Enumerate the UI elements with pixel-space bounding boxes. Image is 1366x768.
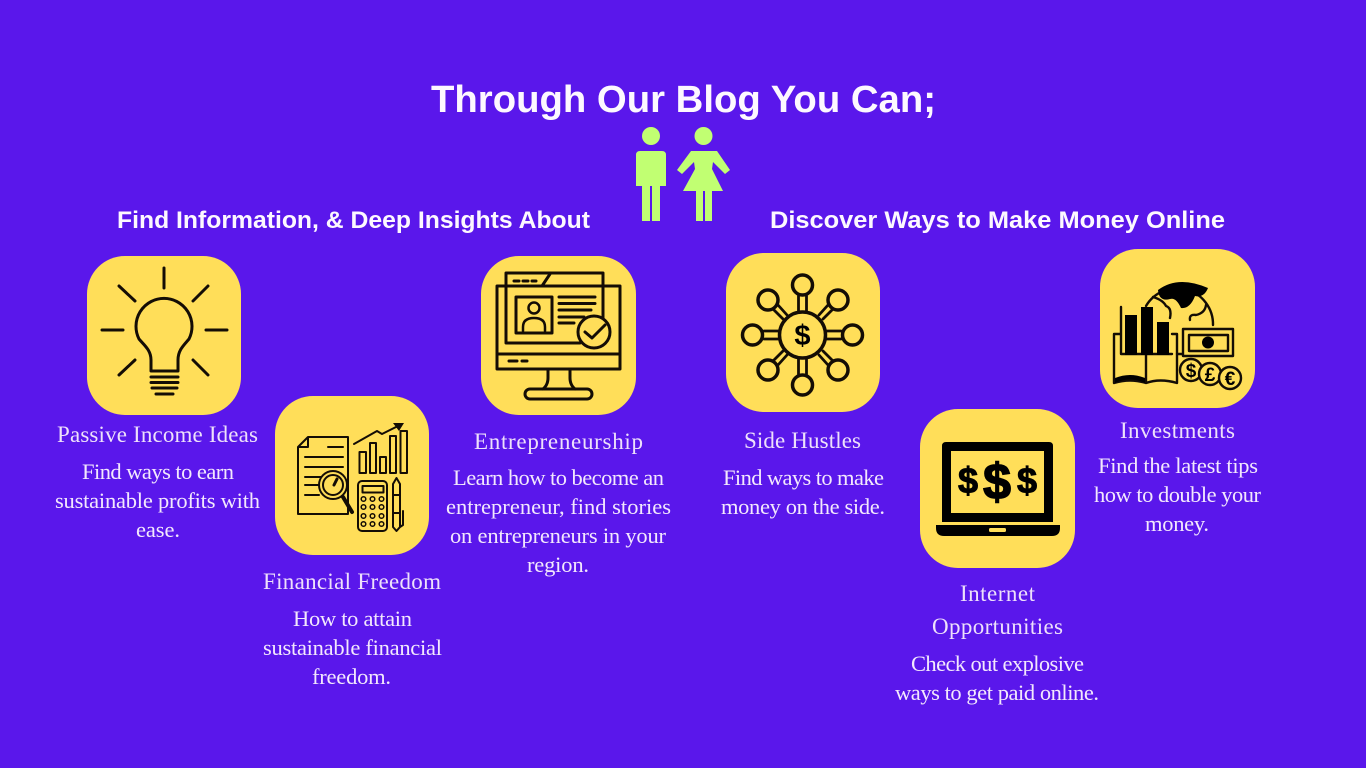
description: financial freedom: How to attain bbox=[293, 606, 412, 631]
description: passive income ideas: Find ways to earn bbox=[82, 459, 234, 484]
description: investments: Find the latest tips bbox=[1098, 453, 1258, 478]
label: entrepreneurship: Entrepreneurship bbox=[474, 429, 643, 454]
panel: financial freedom bbox=[263, 396, 442, 689]
description: investments: money. bbox=[1145, 511, 1209, 536]
panel: internet opportunities bbox=[895, 409, 1099, 705]
label: side hustles: Side Hustles bbox=[744, 428, 861, 453]
icon card: laptop with dollars: $ bbox=[983, 454, 1011, 510]
label: internet opportunities: Opportunities bbox=[932, 614, 1063, 639]
label: passive income ideas: Passive Income Ideas bbox=[57, 422, 258, 447]
description: financial freedom: sustainable financial bbox=[263, 635, 442, 660]
title: Through Our Blog You Can; bbox=[431, 79, 936, 121]
panel: passive income ideas bbox=[55, 256, 260, 542]
icon card: globe, chart, money: $ bbox=[1186, 361, 1197, 382]
icon card: laptop with dollars bbox=[920, 409, 1075, 568]
icon card: computer profile bbox=[481, 256, 636, 415]
description: internet opportunities: Check out explosive bbox=[911, 651, 1084, 676]
description: entrepreneurship: on entrepreneurs in your bbox=[450, 523, 666, 548]
label: internet opportunities bbox=[932, 581, 1063, 639]
description: financial freedom bbox=[263, 606, 442, 689]
panel: entrepreneurship bbox=[446, 256, 671, 577]
icon: man and woman bbox=[636, 127, 730, 221]
icon card: dollar network bbox=[726, 253, 880, 412]
icon card: laptop with dollars: $ bbox=[958, 460, 978, 501]
description: passive income ideas: sustainable profits with bbox=[55, 488, 260, 513]
description: investments: how to double your bbox=[1094, 482, 1262, 507]
icon card: dollar network: $ bbox=[794, 320, 811, 352]
description: internet opportunities bbox=[895, 651, 1099, 705]
description: passive income ideas bbox=[55, 459, 260, 542]
icon card: globe, chart, money: £ bbox=[1205, 365, 1216, 386]
icon card: globe, chart, money bbox=[1100, 249, 1255, 408]
icon card: laptop with dollars: $ bbox=[1017, 460, 1037, 501]
label: financial freedom: Financial Freedom bbox=[263, 569, 441, 594]
label: internet opportunities: Internet bbox=[960, 581, 1036, 606]
description: entrepreneurship: Learn how to become an bbox=[453, 465, 664, 490]
description: side hustles bbox=[721, 465, 885, 519]
description: side hustles: money on the side. bbox=[721, 494, 885, 519]
description: internet opportunities: ways to get paid online. bbox=[895, 680, 1099, 705]
icon card: globe, chart, money: € bbox=[1225, 369, 1236, 390]
heading: left column: Find Information, & Deep Insights About bbox=[117, 207, 590, 234]
description: passive income ideas: ease. bbox=[136, 517, 180, 542]
icon card: light bulb bbox=[87, 256, 241, 415]
heading: right column: Discover Ways to Make Money Online bbox=[770, 207, 1225, 234]
label: investments: Investments bbox=[1120, 418, 1235, 443]
description: entrepreneurship: entrepreneur, find stories bbox=[446, 494, 671, 519]
description: financial freedom: freedom. bbox=[312, 664, 391, 689]
icon card: document and charts bbox=[275, 396, 429, 555]
panel: side hustles bbox=[721, 253, 885, 519]
description: entrepreneurship bbox=[446, 465, 671, 577]
description: investments bbox=[1094, 453, 1262, 536]
description: entrepreneurship: region. bbox=[527, 552, 589, 577]
panel: investments bbox=[1094, 249, 1262, 536]
description: side hustles: Find ways to make bbox=[723, 465, 884, 490]
